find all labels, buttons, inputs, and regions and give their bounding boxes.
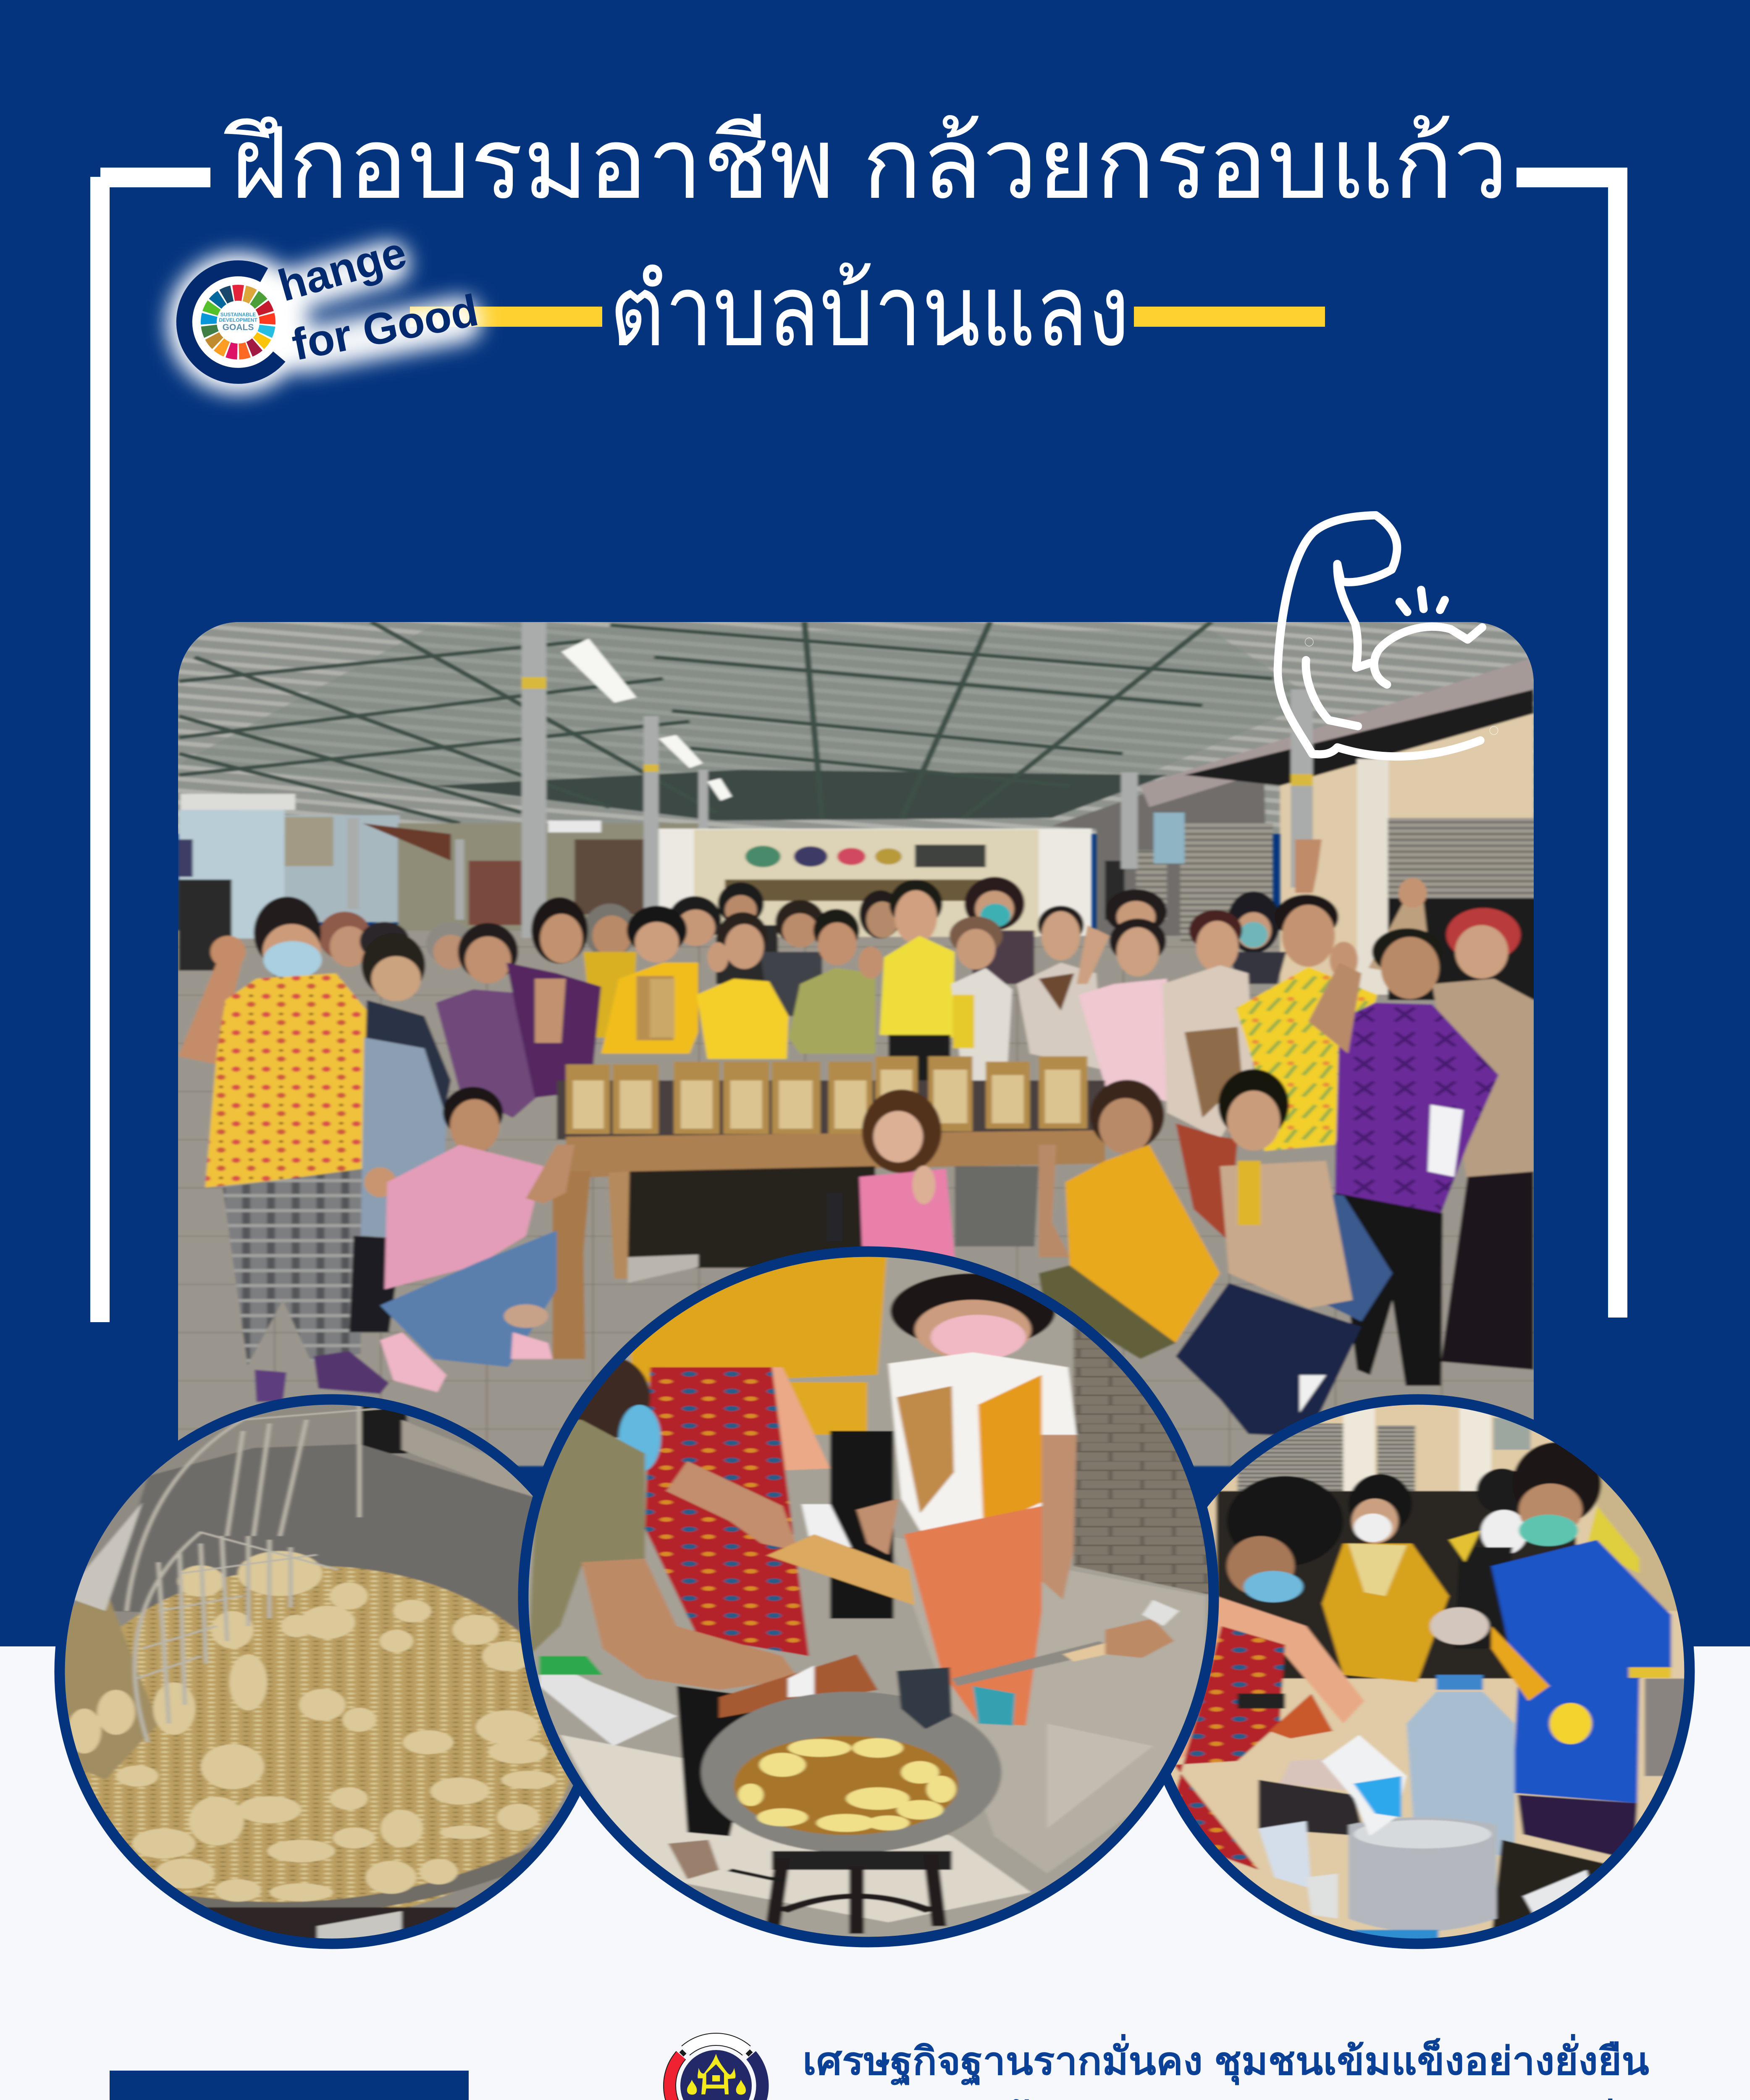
person: bright yellow front (880, 879, 955, 1094)
circle photo: centre, slicing bananas over wok (507, 1236, 1248, 1986)
logo: Change for Good: for Good (288, 285, 482, 370)
person: kneeling pink shirt (380, 1087, 575, 1392)
top of photo area: yellow shirt man and peach sleeve (613, 1236, 888, 1382)
floor (168, 930, 1582, 1466)
woman in yellow (1349, 1474, 1412, 1534)
person: white pattern shirt (1162, 910, 1254, 1241)
burner stand (772, 1851, 952, 1870)
man in black (1477, 1468, 1527, 1514)
person: purple shirt (1308, 928, 1498, 1386)
logo: Change for Good (168, 227, 485, 394)
wall left (178, 810, 285, 938)
icon: flexed arm (1278, 515, 1494, 756)
person: yellow blouse (697, 912, 789, 1059)
person: olive shirt (789, 909, 883, 1054)
logo: Change for Good: GOALS (223, 323, 254, 332)
woman in peach and red apron (666, 1367, 830, 1470)
person: floral white blouse (1017, 906, 1103, 1070)
seal: community development department (669, 2039, 763, 2100)
wooden boards (767, 1534, 915, 1605)
subtitle with yellow bars: ตำบลบ้านแลง (609, 256, 1130, 367)
back row heads (318, 839, 1322, 1037)
person: purple plaid (436, 923, 544, 1118)
roof (168, 609, 1582, 834)
white frame (90, 168, 1627, 1322)
logo: Change for Good: DEVELOPMENT (219, 317, 257, 323)
pillars (347, 622, 1313, 938)
woman left with red apron (1227, 1476, 1343, 1566)
circle photo: right, pouring batter (1142, 1386, 1734, 1986)
slogan: เศรษฐกิจฐานรากมั่นคง ชุมชนเข้มแข็งอย่างยั่งยืน (803, 2034, 1649, 2087)
circle photo: frying banana chips (42, 1386, 635, 1986)
wok (701, 1692, 1002, 1853)
banner (659, 829, 1092, 936)
person: yellow shirt with glasses (601, 906, 698, 1054)
lights (561, 638, 637, 703)
right building (1053, 780, 1267, 937)
woman in blue shirt (1512, 1442, 1601, 1525)
person: pink blouse (1077, 919, 1169, 1102)
logo: Change for Good: SUSTAINABLE (220, 312, 256, 318)
person: yellow floral shirt with mask (178, 897, 396, 1402)
title: ฝึกอบรมอาชีพ กล้วยกรอบแก้ว (224, 108, 1509, 219)
person: kneeling gold shirt (1039, 1080, 1220, 1359)
water bottle (1407, 1692, 1514, 1862)
person: elderly white shirt (950, 916, 1012, 1091)
person: beige jacket with backpack (1176, 1069, 1392, 1437)
contact button (110, 2071, 469, 2100)
person: yellow green floral (1236, 895, 1377, 1151)
woman with mask, white and gold shirt (890, 1273, 1055, 1349)
logo: Change for Good: hange (273, 227, 412, 311)
table and pot (1491, 1840, 1608, 1937)
main group photo (168, 609, 1582, 1466)
person in olive (566, 1356, 650, 1438)
person: dark purple (506, 897, 601, 1097)
person: beige blouse red hair (1369, 878, 1534, 1370)
person: apron (349, 933, 451, 1332)
person: interviewer in pink (826, 1089, 955, 1257)
table with banana chip bags (553, 979, 1105, 1359)
subtitle with yellow bars (410, 256, 1325, 367)
ladle (952, 1641, 1112, 1686)
slogan (803, 2034, 1660, 2100)
